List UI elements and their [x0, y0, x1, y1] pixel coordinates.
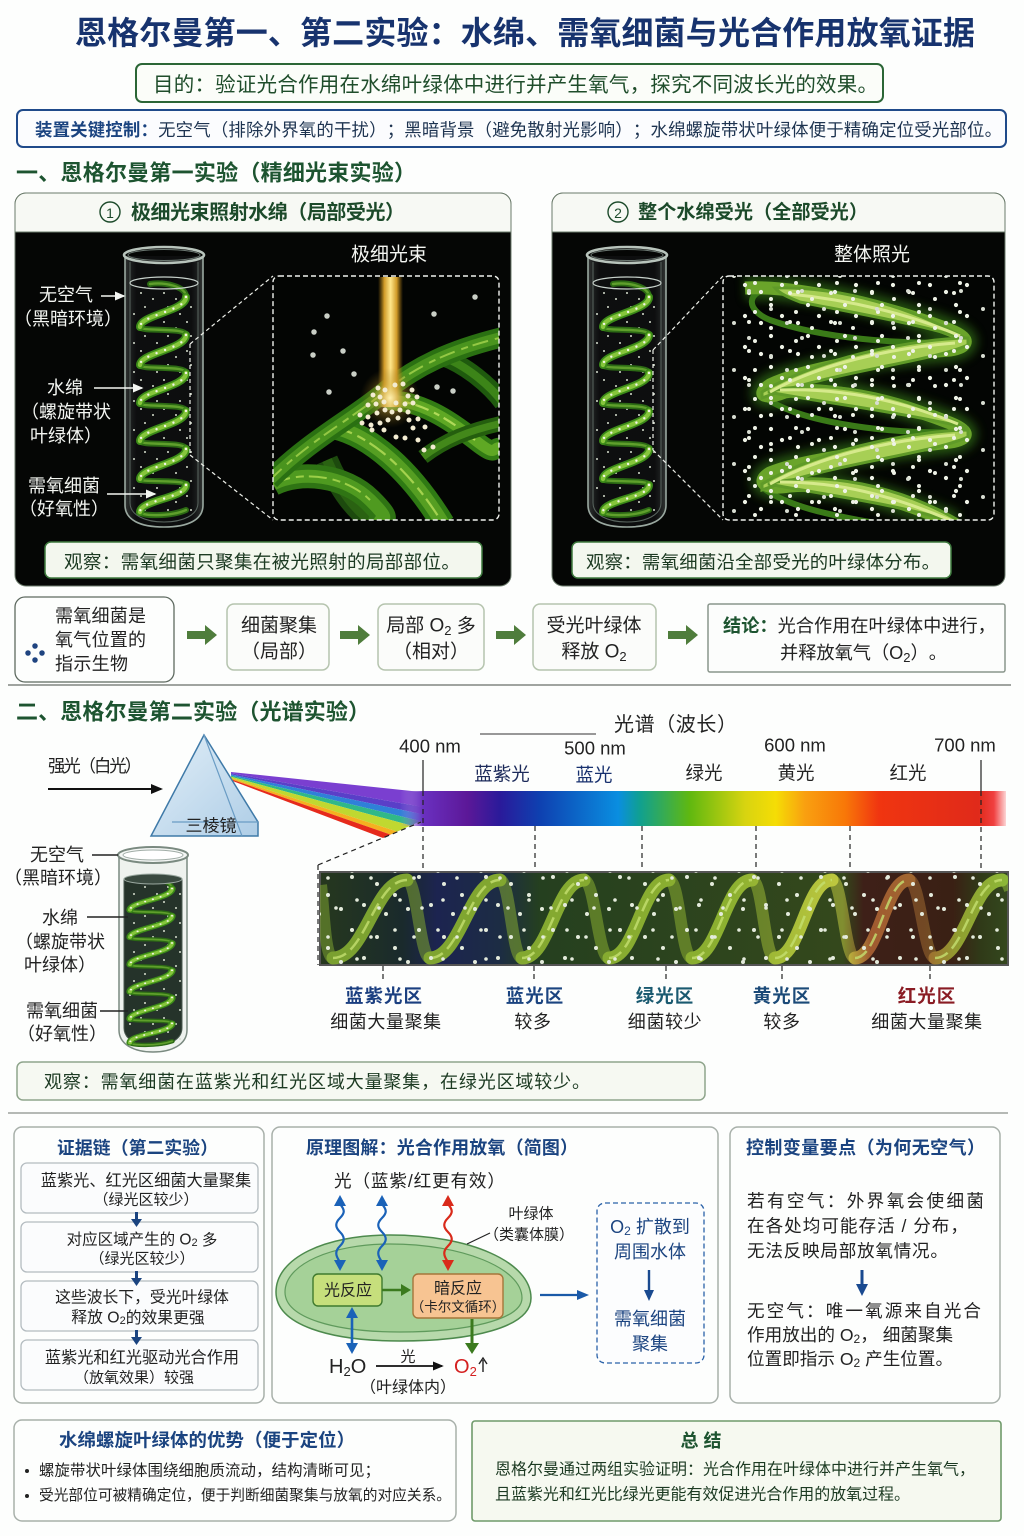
magnified view: all bacteria along helix	[723, 276, 994, 526]
arrow down	[856, 1270, 868, 1296]
without air text: ， 细菌聚集	[860, 1325, 953, 1345]
bacteria cluster	[360, 384, 433, 450]
diffusion box: O	[610, 1217, 624, 1237]
light reaction: 光反应	[324, 1280, 372, 1300]
zoom connector 2	[653, 276, 723, 520]
diffusion box: 扩散到	[631, 1217, 690, 1237]
equation: H	[329, 1356, 343, 1378]
flow: conclusion: 2	[903, 650, 911, 664]
diagram heading: 原理图解：光合作用放氧（简图）	[306, 1137, 578, 1158]
dark reaction	[411, 1274, 505, 1318]
evidence step 2: 多	[198, 1230, 217, 1248]
wavelength labels: 500 nm	[564, 738, 626, 758]
flow: indicator organism: 需氧细菌是	[55, 606, 146, 626]
region: yellow: 黄光区	[753, 986, 811, 1006]
evidence step 3: 释放 O	[71, 1310, 120, 1326]
region ticks	[383, 966, 930, 980]
light reaction	[313, 1274, 382, 1306]
purpose box	[136, 64, 883, 102]
spectrum title: 光谱（波长）	[614, 713, 737, 736]
colour band names: 黄光	[777, 762, 815, 784]
arrow: oxygen out	[465, 1319, 479, 1354]
colour band names	[474, 762, 927, 786]
region: blue	[506, 986, 564, 1032]
dark reaction: （卡尔文循环）	[411, 1300, 505, 1314]
panel 2 heading: 整个水绵受光（全部受光）	[638, 200, 868, 224]
observation 3: 观察：需氧细菌在蓝紫光和红光区域大量聚集，在绿光区域较少。	[44, 1072, 590, 1092]
test tube with spirogyra	[124, 247, 204, 527]
label: no air: 无空气	[39, 285, 93, 305]
summary text	[495, 1460, 975, 1504]
bullet 1: 螺旋带状叶绿体围绕细胞质流动，结构清晰可见；	[39, 1462, 380, 1480]
panel 1 heading: 极细光束照射水绵（局部受光）	[131, 201, 405, 224]
diffusion box: 聚集	[632, 1334, 668, 1354]
wavelength labels: 400 nm	[399, 736, 461, 756]
tube 3 labels: 需氧细菌	[26, 1001, 98, 1021]
arrow: water	[346, 1307, 358, 1354]
tube 3 labels: 叶绿体）	[24, 955, 96, 975]
evidence step 2	[21, 1222, 258, 1272]
chloroplast label: （类囊体膜）	[484, 1226, 574, 1244]
label: aerobic bacteria	[19, 476, 155, 519]
observation 3	[17, 1062, 705, 1100]
equation	[329, 1348, 487, 1396]
arrow 3	[496, 625, 526, 645]
evidence step 2: （绿光区较少）	[89, 1250, 195, 1268]
flow: bacteria gather: （局部）	[241, 640, 317, 662]
icon: bacteria dots	[28, 646, 42, 660]
wavelength labels: 600 nm	[764, 734, 826, 756]
equation: O	[351, 1356, 366, 1378]
magnified view: beam on helix	[270, 276, 503, 524]
evidence step 3	[21, 1281, 258, 1331]
with air text: 若有空气：外界氧会使细菌	[747, 1191, 984, 1211]
region: blue-violet: 蓝紫光区	[345, 986, 423, 1006]
flow: bacteria gather: 细菌聚集	[241, 614, 317, 636]
apparatus key control box: 装置关键控制：无空气（排除外界氧的干扰）；黑暗背景（避免散射光影响）；水绵螺旋带状叶绿体便于精确定位受光部位。	[35, 120, 1002, 140]
heading: experiment 2: 二、恩格尔曼第二实验（光谱实验）	[16, 700, 370, 724]
region: blue-violet	[330, 986, 442, 1032]
diffusion box	[597, 1203, 704, 1363]
flow: conclusion: 并释放氧气（O	[780, 643, 903, 663]
without air text: 2	[854, 1332, 861, 1346]
tube 3 labels: （螺旋带状	[15, 932, 105, 952]
evidence step 3: 的效果更强	[126, 1308, 205, 1326]
label: aerobic bacteria: 需氧细菌	[28, 476, 100, 496]
flow: conclusion: ）。	[911, 643, 947, 663]
number badge 1	[100, 202, 120, 222]
flow: local oxygen: 局部 O	[386, 616, 444, 636]
evidence step 1	[21, 1163, 258, 1213]
panel: photosynthesis diagram	[272, 1127, 718, 1403]
flow: local oxygen	[378, 604, 484, 670]
bullet 2: 受光部位可被精确定位，便于判断细菌聚集与放氧的对应关系。	[39, 1486, 451, 1504]
control heading: 控制变量要点（为何无空气）	[746, 1137, 985, 1158]
region: blue: 蓝光区	[506, 986, 564, 1006]
label: whole illumination: 整体照光	[834, 244, 910, 266]
tube 3 labels: 水绵	[42, 908, 78, 928]
light beam	[360, 277, 420, 428]
flow: chloroplast releases oxygen	[533, 604, 656, 670]
colour band names: 红光	[889, 762, 927, 784]
test tube 2	[587, 247, 667, 527]
tube 3 labels: （黑暗环境）	[4, 868, 112, 888]
advantages heading: 水绵螺旋叶绿体的优势（便于定位）	[59, 1430, 355, 1450]
without air text	[747, 1301, 981, 1370]
evidence step 1: 蓝紫光、红光区细菌大量聚集	[41, 1172, 251, 1190]
spectrum strip with helix	[320, 872, 1010, 965]
observation 2: 观察：需氧细菌沿全部受光的叶绿体分布。	[586, 552, 940, 572]
equation: 2	[470, 1364, 477, 1378]
evidence step 3: 这些波长下，受光叶绿体	[55, 1288, 229, 1306]
diffusion box: 需氧细菌	[614, 1309, 686, 1329]
region: green: 细菌较少	[628, 1012, 702, 1032]
flow: local oxygen: （相对）	[393, 640, 469, 662]
flow: chloroplast releases oxygen: 2	[619, 648, 627, 664]
number badge 2: 2	[614, 205, 622, 221]
flow: chloroplast releases oxygen: 释放 O	[561, 642, 619, 662]
title: 恩格尔曼第一、第二实验：水绵、需氧细菌与光合作用放氧证据	[75, 15, 975, 51]
apparatus key control box	[17, 110, 1006, 147]
region: green: 绿光区	[636, 986, 694, 1006]
sparse bacteria	[313, 297, 475, 392]
panel: local light beam	[14, 193, 511, 586]
label: strong white light: 强光（白光）	[48, 756, 142, 776]
label: strong white light	[48, 756, 161, 789]
with air text	[747, 1191, 984, 1261]
label: aerobic bacteria: （好氧性）	[19, 499, 109, 519]
tube 3 labels: 无空气	[30, 845, 84, 865]
label: spirogyra	[21, 378, 142, 446]
panel: summary	[472, 1421, 1001, 1521]
panel: whole light	[552, 193, 1005, 586]
without air text: 无空气：唯一氧源来自光合	[747, 1301, 981, 1321]
tube 3 labels	[4, 845, 128, 1044]
region: yellow: 较多	[763, 1012, 801, 1032]
flow: local oxygen: 多	[452, 614, 476, 636]
region: blue: 较多	[514, 1012, 552, 1032]
region: red: 红光区	[898, 986, 956, 1006]
dark reaction: 暗反应	[434, 1278, 482, 1298]
prism: 三棱镜	[186, 816, 236, 836]
equation: O	[454, 1356, 470, 1378]
evidence arrows	[131, 1212, 142, 1345]
label: no air	[14, 285, 124, 329]
number badge 1: 1	[106, 205, 114, 221]
tube 3 labels: （好氧性）	[17, 1024, 107, 1044]
flow: indicator organism: 指示生物	[55, 654, 128, 674]
without air text: 2	[854, 1356, 861, 1370]
chloroplast label: 叶绿体	[508, 1206, 554, 1222]
wavy blue arrow 1	[334, 1195, 346, 1271]
arrow 4	[668, 625, 698, 645]
experimental tube 3	[118, 847, 188, 1052]
rainbow beam	[231, 772, 422, 838]
region: red: 细菌大量聚集	[871, 1012, 983, 1032]
diffusion box: 周围水体	[614, 1242, 686, 1262]
summary text: 恩格尔曼通过两组实验证明：光合作用在叶绿体中进行并产生氧气，	[495, 1460, 975, 1478]
flow: conclusion: 结论：光合作用在叶绿体中进行，	[723, 616, 996, 636]
without air text: 位置即指示 O	[747, 1349, 854, 1369]
chloroplast label	[467, 1206, 574, 1244]
arrow: light to dark reaction	[382, 1284, 411, 1296]
heading: experiment 1: 一、恩格尔曼第一实验（精细光束实验）	[16, 160, 416, 186]
panel: evidence chain	[14, 1127, 264, 1403]
flow: local oxygen: 2	[444, 622, 452, 638]
flow: bacteria gather	[227, 604, 329, 670]
arrow 1	[187, 625, 217, 645]
number badge 2	[608, 202, 628, 222]
observation 2	[572, 542, 951, 578]
arrow to diffusion box	[540, 1290, 589, 1300]
spectrum guide lines	[318, 760, 981, 965]
wavelength labels: 700 nm	[934, 734, 996, 756]
evidence step 4: 蓝紫光和红光驱动光合作用	[45, 1349, 239, 1367]
without air text: 作用放出的 O	[747, 1325, 854, 1345]
region: blue-violet: 细菌大量聚集	[330, 1012, 442, 1032]
wavy red arrow	[442, 1195, 454, 1271]
colour band names: 蓝紫光	[474, 764, 530, 784]
label: no air: （黑暗环境）	[14, 309, 122, 329]
evidence heading: 证据链（第二实验）	[57, 1137, 218, 1158]
without air text: 产生位置。	[860, 1349, 953, 1369]
label: fine beam: 极细光束	[351, 244, 427, 266]
panel: controlled variables	[730, 1127, 1000, 1403]
equation: 光	[400, 1348, 416, 1366]
evidence step 3: 2	[120, 1315, 126, 1327]
chloroplast	[276, 1235, 531, 1341]
label: spirogyra: （螺旋带状	[21, 402, 111, 422]
region: green	[628, 986, 702, 1032]
evidence step 1: （绿光区较少）	[93, 1190, 199, 1208]
with air text: 无法反映局部放氧情况。	[747, 1241, 948, 1261]
wavelength labels	[399, 734, 996, 758]
with air text: 在各处均可能存活 / 分布，	[747, 1216, 968, 1236]
evidence step 4	[21, 1340, 258, 1390]
flow: indicator organism: 氧气位置的	[55, 630, 146, 650]
prism	[151, 735, 258, 836]
summary heading: 总 结	[680, 1431, 722, 1451]
region: yellow	[753, 986, 811, 1032]
colour band names: 绿光	[685, 762, 723, 784]
summary text: 且蓝紫光和红光比绿光更能有效促进光合作用的放氧过程。	[495, 1486, 910, 1504]
panel: spiral chloroplast advantages	[14, 1420, 456, 1521]
flow: chloroplast releases oxygen: 受光叶绿体	[546, 614, 642, 636]
evidence step 4: （放氧效果）较强	[74, 1368, 194, 1386]
purpose box: 目的：验证光合作用在水绵叶绿体中进行并产生氧气，探究不同波长光的效果。	[153, 74, 878, 96]
zoom connector	[190, 276, 273, 520]
equation: （叶绿体内）	[360, 1378, 456, 1396]
diffusion box: 2	[624, 1224, 631, 1238]
flow: conclusion	[708, 604, 1005, 672]
wavy blue arrow 2	[376, 1195, 388, 1271]
region: red	[871, 986, 983, 1032]
evidence step 2: 对应区域产生的 O	[67, 1232, 191, 1248]
observation 1: 观察：需氧细菌只聚集在被光照射的局部部位。	[64, 552, 460, 572]
label: spirogyra: 叶绿体）	[30, 426, 102, 446]
flow: indicator organism	[15, 597, 174, 682]
colour band names: 蓝光	[575, 764, 613, 786]
equation: 2	[343, 1364, 351, 1378]
label: spirogyra: 水绵	[47, 378, 83, 398]
light label: 光（蓝紫/红更有效）	[334, 1171, 505, 1191]
observation 1	[45, 542, 482, 578]
evidence step 2: 2	[191, 1237, 198, 1249]
spectrum bar	[400, 791, 1006, 826]
arrow 2	[340, 625, 370, 645]
